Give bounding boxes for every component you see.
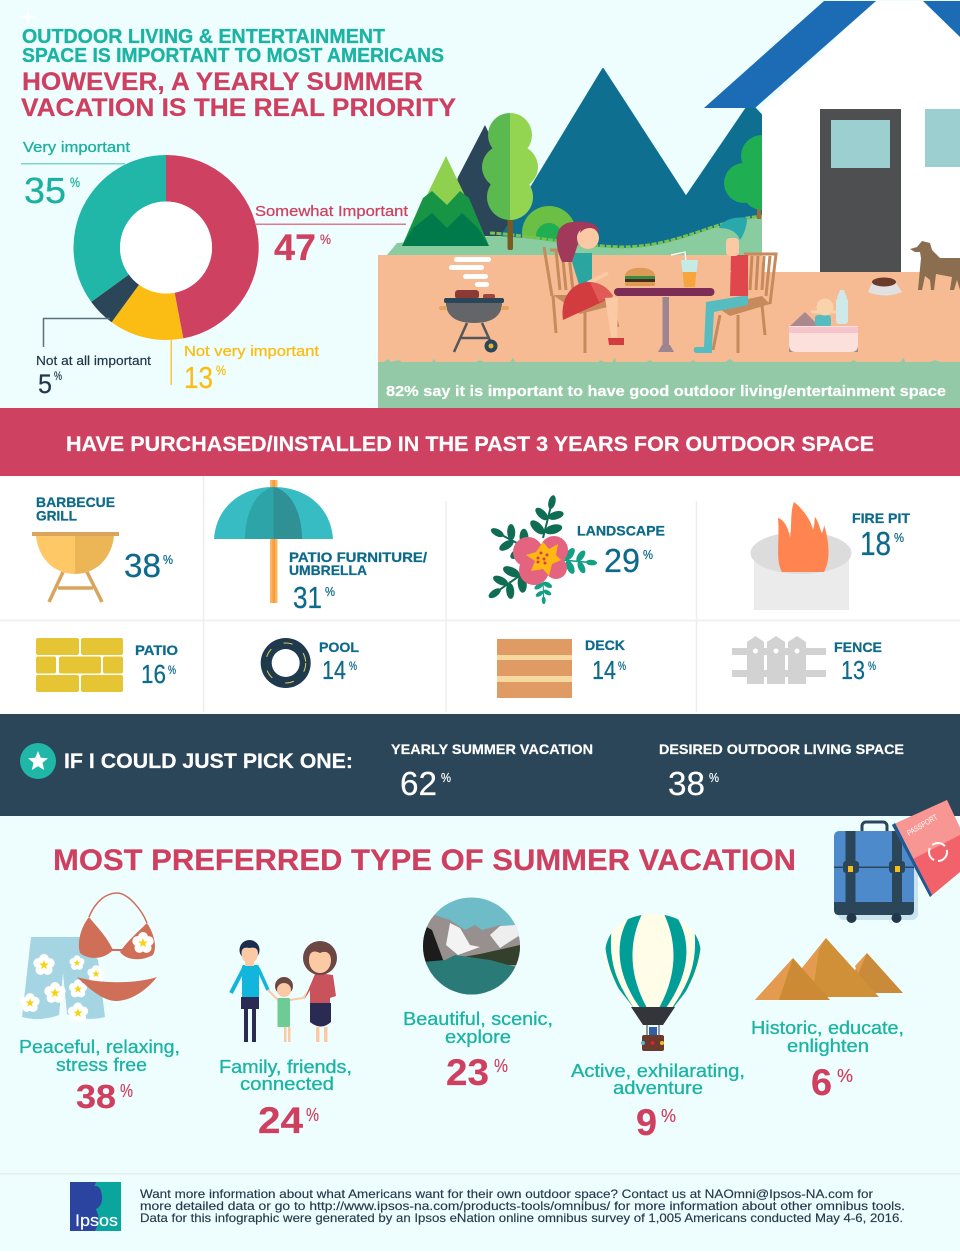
value xyxy=(446,1052,508,1093)
item: fence: 13 xyxy=(841,655,865,685)
item: fire pit xyxy=(750,502,910,610)
footer note: Want more information about what Americans want for their own outdoor space? Contact us at NAOmni@Ipsos-NA.com for xyxy=(140,1187,873,1201)
title: SPACE IS IMPORTANT TO MOST AMERICANS xyxy=(22,45,444,67)
item: deck: DECK xyxy=(585,637,625,653)
item: deck: 14 xyxy=(592,655,616,685)
value: % xyxy=(120,1081,133,1101)
scene: ground xyxy=(378,255,960,408)
item: fence: % xyxy=(868,659,876,673)
value: % xyxy=(661,1106,676,1126)
item: fence xyxy=(732,636,882,685)
item: fire pit: FIRE PIT xyxy=(852,510,910,526)
value xyxy=(811,1062,853,1103)
item: patio bricks xyxy=(36,638,178,692)
item: patio furniture / umbrella: PATIO FURNITURE/ xyxy=(289,549,427,565)
label: not at all important 5%: % xyxy=(54,369,62,383)
panel: purchases grid xyxy=(0,476,960,714)
item: barbecue grill: 38 xyxy=(124,547,161,584)
item: pool ring: 14 xyxy=(322,655,346,685)
value: % xyxy=(837,1066,853,1086)
label: very important 35%: 35 xyxy=(24,170,66,211)
scene: baby in basket xyxy=(789,290,858,352)
value: 38 xyxy=(76,1078,116,1115)
icon: swim shorts and bikini xyxy=(20,893,157,1022)
label: not very important 13%: 13 xyxy=(184,360,213,395)
icon: star badge xyxy=(20,743,56,779)
scene: smoking grill xyxy=(439,257,509,352)
title: HOWEVER, A YEARLY SUMMER xyxy=(22,68,423,96)
item: patio bricks: % xyxy=(168,663,176,677)
scene: mountains and trees xyxy=(387,69,783,260)
value xyxy=(636,1102,676,1143)
label: not very important 13%: Not very important xyxy=(184,343,320,360)
icon: hot air balloon xyxy=(605,914,701,1051)
value xyxy=(258,1100,319,1141)
option: peaceful, relaxing xyxy=(19,893,180,1115)
logo: Ipsos xyxy=(70,1182,121,1231)
caption: adventure xyxy=(613,1078,703,1098)
item: barbecue grill: % xyxy=(163,552,173,567)
stat: desired outdoor living space 38% xyxy=(659,741,904,802)
scene: house xyxy=(704,1,960,272)
label: very important 35%: % xyxy=(70,174,80,190)
item: deck: % xyxy=(618,659,626,673)
value: 23 xyxy=(446,1052,489,1093)
option: historic, educate xyxy=(751,938,904,1103)
title: VACATION IS THE REAL PRIORITY xyxy=(21,94,456,122)
stat: yearly summer vacation 62%: 62 xyxy=(400,765,437,802)
option: family, friends xyxy=(219,940,352,1141)
item: fire pit: 18 xyxy=(860,525,891,562)
footer note: Data for this infographic were generated by an Ipsos eNation online omnibus survey of 1,005 Americans conducted May 4-6, 2016. xyxy=(140,1211,903,1225)
scene: dog and bowl xyxy=(868,241,960,296)
caption: enlighten xyxy=(787,1036,869,1056)
value: % xyxy=(494,1056,508,1076)
label: somewhat important 47% xyxy=(255,203,409,268)
caption: Historic, educate, xyxy=(751,1018,904,1038)
item: patio bricks: 16 xyxy=(141,659,166,689)
heading: most preferred vacation: MOST PREFERRED TYPE OF SUMMER VACATION xyxy=(53,844,796,877)
item: pool ring: % xyxy=(349,659,357,673)
item: landscape: % xyxy=(643,547,653,562)
caption xyxy=(403,1009,553,1047)
item: barbecue grill: GRILL xyxy=(36,508,77,524)
label: very important 35% xyxy=(21,139,131,211)
item: landscape: 29 xyxy=(604,542,640,579)
item: pool ring xyxy=(261,638,359,688)
icon: suitcase and passport: PASSPORT xyxy=(905,812,939,838)
footer note xyxy=(140,1187,905,1225)
label: somewhat important 47%: Somewhat Important xyxy=(255,203,409,220)
title: OUTDOOR LIVING & ENTERTAINMENT xyxy=(22,26,385,48)
scene: man on chair xyxy=(694,217,776,353)
section band: purchased in past 3 years: HAVE PURCHASED/INSTALLED IN THE PAST 3 YEARS FOR OUTDOOR SPACE xyxy=(66,433,874,456)
label: very important 35%: Very important xyxy=(23,139,131,156)
caption xyxy=(19,1037,180,1075)
label: not at all important 5%: 5 xyxy=(38,369,52,399)
stat: desired outdoor living space 38%: % xyxy=(709,770,719,785)
item: landscape: LANDSCAPE xyxy=(577,522,665,538)
icon: mountain lake photo xyxy=(423,897,520,995)
caption xyxy=(571,1061,745,1098)
option: active, exhilarating xyxy=(571,914,745,1143)
item: landscape xyxy=(479,491,665,612)
caption: Active, exhilarating, xyxy=(571,1061,745,1081)
item: fire pit: % xyxy=(894,530,904,545)
icon: suitcase and passport xyxy=(834,800,960,923)
caption: Peaceful, relaxing, xyxy=(19,1037,180,1057)
pick one heading: IF I COULD JUST PICK ONE: xyxy=(64,750,353,773)
donut chart: importance of outdoor space xyxy=(74,155,259,340)
sparkle xyxy=(19,9,37,26)
scene caption: 82% say it is important to have good outdoor living/entertainment space xyxy=(386,383,946,400)
illustration: patio scene xyxy=(378,1,960,408)
item: pool ring: POOL xyxy=(319,639,359,655)
panel: pick one band xyxy=(0,714,960,816)
value xyxy=(76,1078,133,1115)
item: patio furniture / umbrella: % xyxy=(325,584,335,599)
icon: family xyxy=(231,940,337,1042)
label: somewhat important 47%: 47 xyxy=(274,227,316,268)
item: patio bricks: PATIO xyxy=(135,642,178,658)
item: deck xyxy=(497,637,626,698)
stat: yearly summer vacation 62%: YEARLY SUMMER VACATION xyxy=(391,741,593,757)
label: not at all important 5%: Not at all important xyxy=(36,353,151,368)
stat: desired outdoor living space 38%: 38 xyxy=(668,765,705,802)
label: not at all important 5% xyxy=(36,318,151,399)
caption xyxy=(751,1018,904,1056)
scene: woman on chair xyxy=(544,222,624,353)
value: 9 xyxy=(636,1102,657,1143)
footer xyxy=(0,1173,960,1253)
footer note: more detailed data or go to http://www.ipsos-na.com/products-tools/omnibus/ for more information about other omnibus tools. xyxy=(140,1199,905,1213)
item: barbecue grill xyxy=(32,494,173,602)
item: fence: FENCE xyxy=(834,639,882,655)
scene: table with burger and drink xyxy=(614,252,714,352)
title xyxy=(21,26,456,122)
icon: pyramids xyxy=(755,938,903,1000)
value: 6 xyxy=(811,1062,832,1103)
item: patio furniture / umbrella: 31 xyxy=(293,580,322,615)
item: patio furniture / umbrella: UMBRELLA xyxy=(289,562,367,578)
caption: Beautiful, scenic, xyxy=(403,1009,553,1029)
value: % xyxy=(306,1105,319,1125)
item: patio furniture / umbrella xyxy=(214,480,427,615)
caption: Family, friends, xyxy=(219,1057,352,1077)
stat: yearly summer vacation 62% xyxy=(391,741,593,802)
section band: purchased in past 3 years xyxy=(0,408,960,476)
logo: Ipsos: Ipsos xyxy=(75,1211,118,1230)
caption: stress free xyxy=(56,1055,147,1075)
caption: connected xyxy=(240,1074,334,1094)
option: beautiful, scenic xyxy=(403,897,553,1093)
stat: desired outdoor living space 38%: DESIRED OUTDOOR LIVING SPACE xyxy=(659,741,904,757)
label: not very important 13%: % xyxy=(216,362,226,378)
caption xyxy=(219,1057,352,1094)
stat: yearly summer vacation 62%: % xyxy=(441,770,451,785)
item: barbecue grill: BARBECUE xyxy=(36,494,115,510)
caption: explore xyxy=(445,1027,511,1047)
label: somewhat important 47%: % xyxy=(320,231,331,247)
value: 24 xyxy=(258,1100,303,1141)
label: not very important 13% xyxy=(170,340,320,395)
